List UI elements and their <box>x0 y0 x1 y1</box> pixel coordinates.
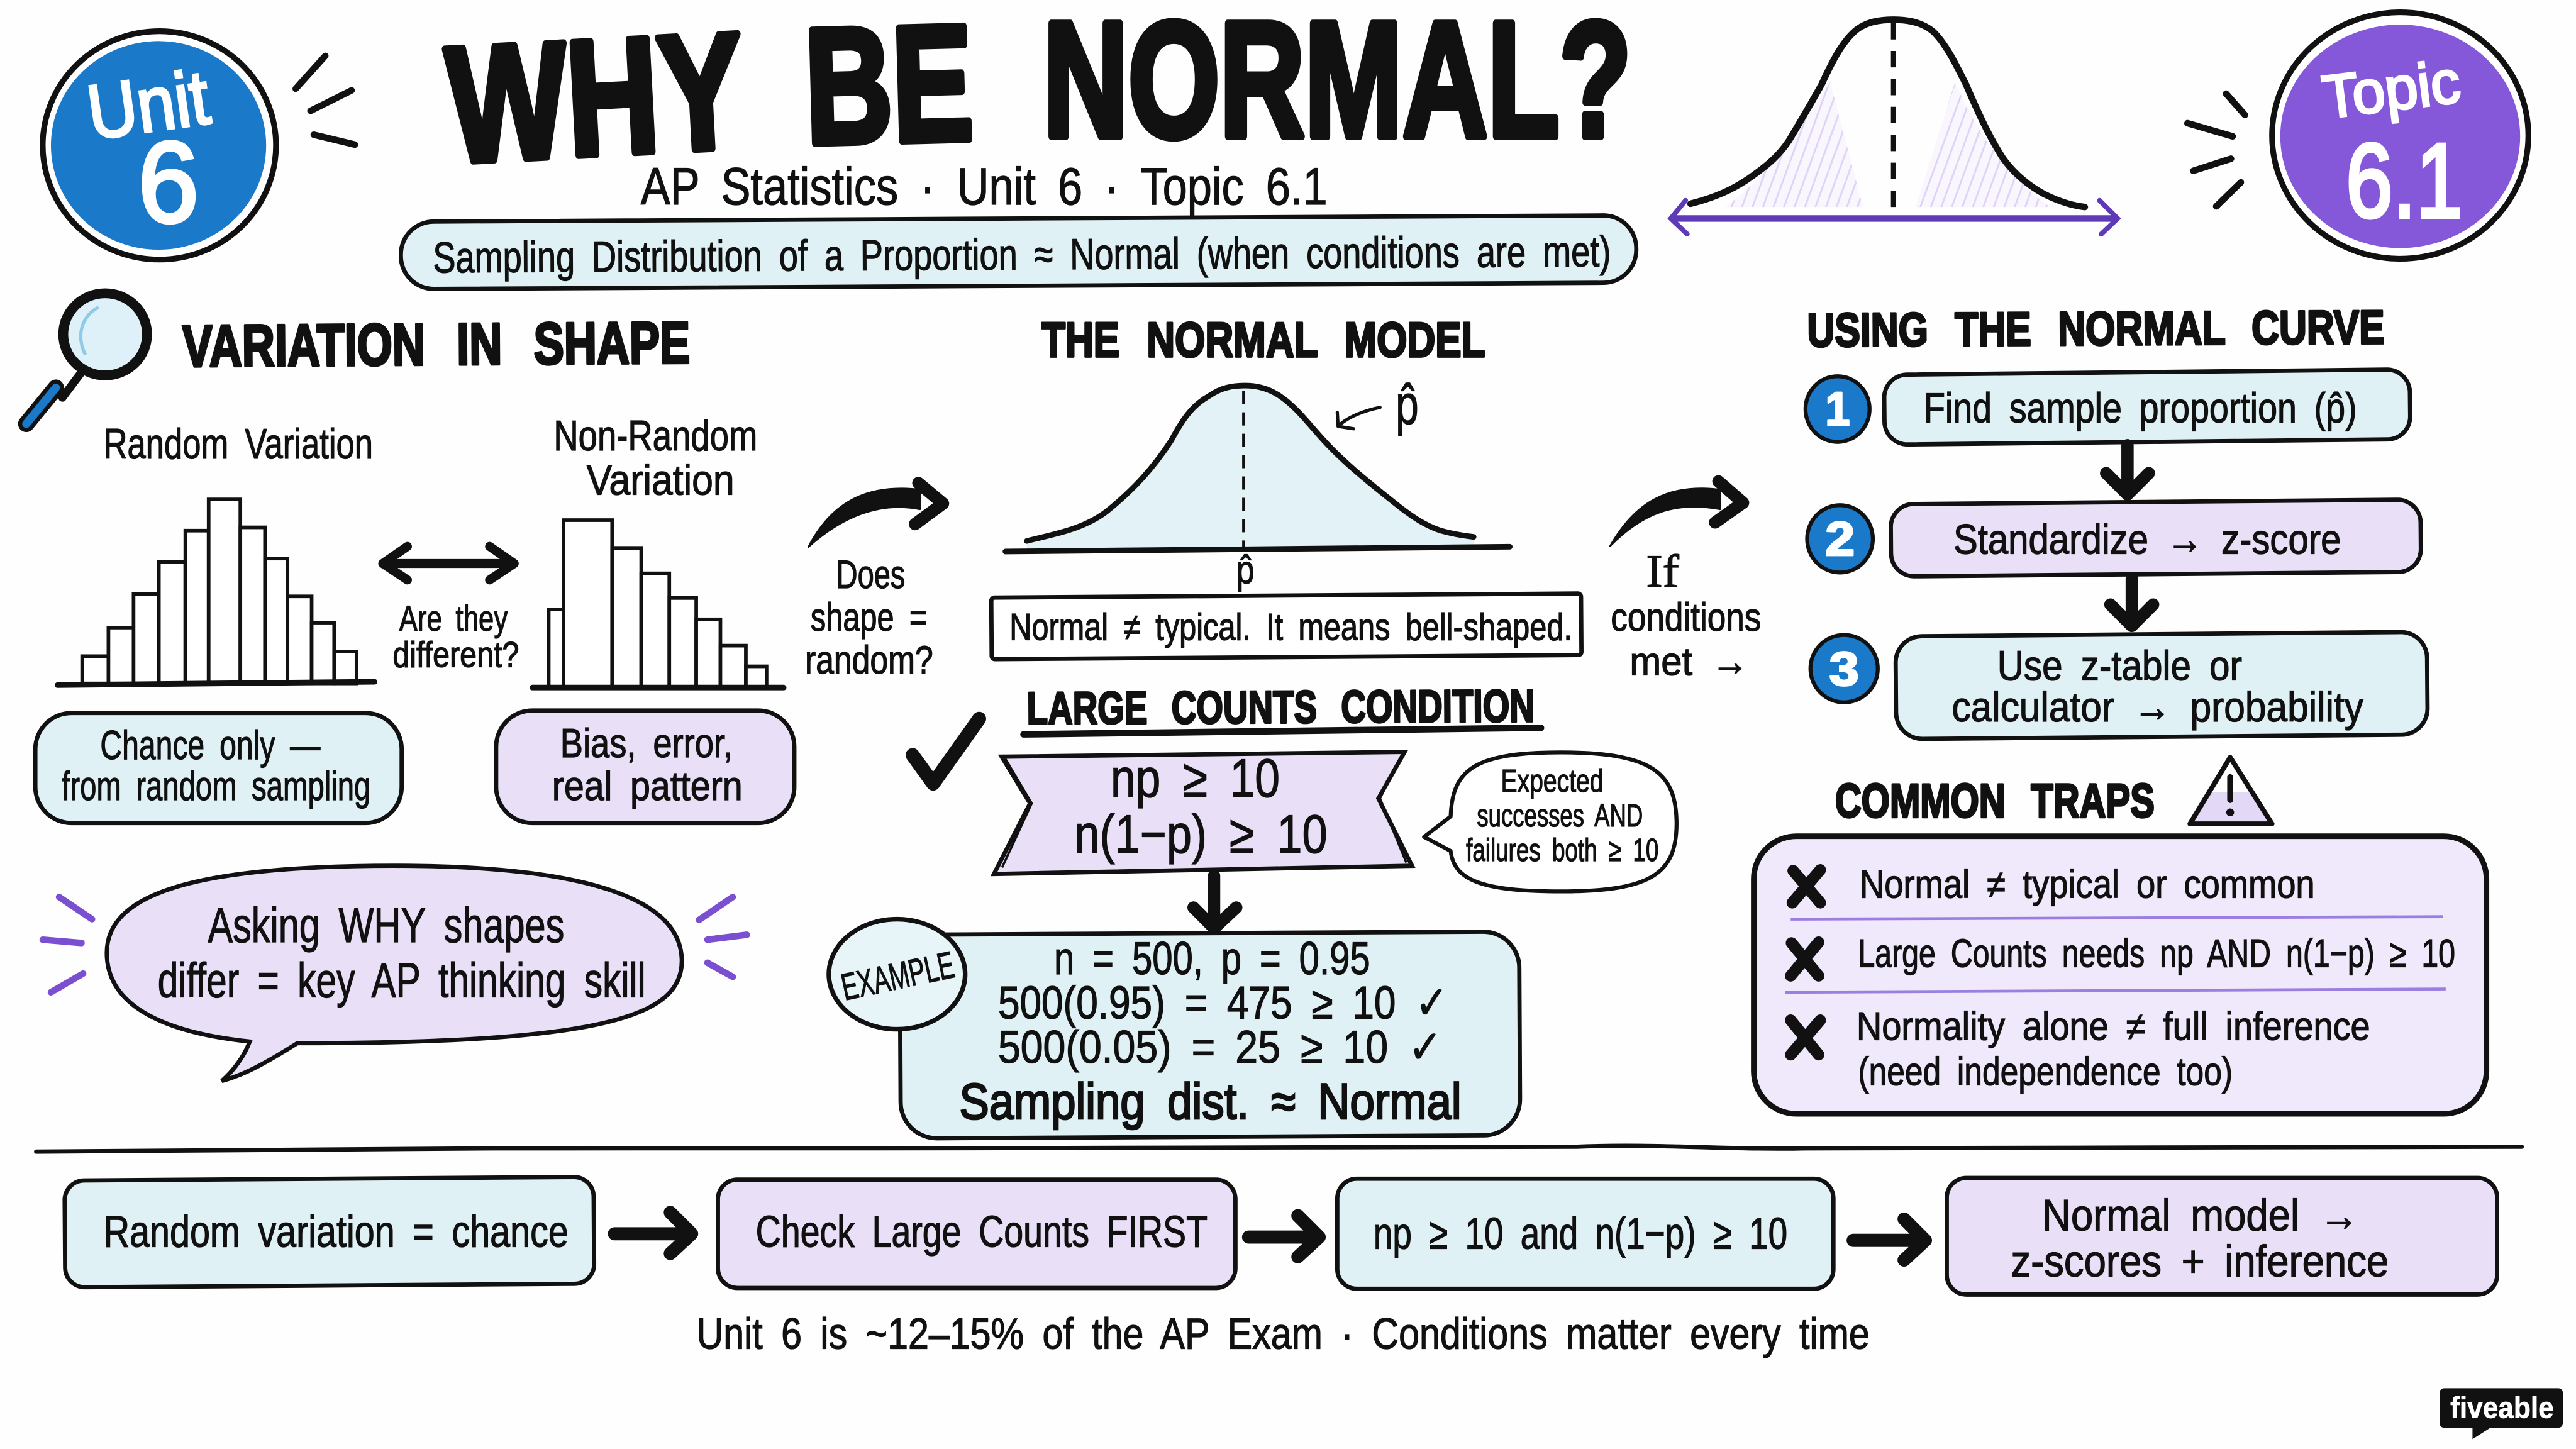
subtitle: AP Statistics · Unit 6 · Topic 6.1 <box>641 157 1328 216</box>
banner pill: sampling distribution: Sampling Distribution of a Proportion ≈ Normal (when conditions are met) <box>433 226 1611 282</box>
logo: fiveable <box>2440 1388 2563 1439</box>
step 3 badge <box>1811 635 1878 702</box>
text: if conditions met: met → <box>1629 640 1749 684</box>
callout: expected successes: Expected <box>1501 763 1604 799</box>
step 2 badge: 2 <box>1825 513 1855 566</box>
item: normality alone: (need independence too) <box>1858 1050 2233 1094</box>
callout: expected successes <box>1424 752 1677 891</box>
arrow: down to example <box>1194 875 1236 928</box>
label: random variation: Random Variation <box>104 421 373 468</box>
icon: emphasis rays right <box>2187 94 2245 206</box>
summary box 1: Random variation = chance <box>104 1207 569 1257</box>
callout: speech bubble <box>107 866 682 1081</box>
badge: Unit 6 <box>43 31 276 260</box>
panel: example <box>829 919 1520 1138</box>
step 2 box: Standardize → z-score <box>1953 516 2341 563</box>
panel: example: 500(0.05) = 25 ≥ 10 ✓ <box>998 1022 1442 1073</box>
box: chance only <box>35 713 402 823</box>
heading: the normal model: THE NORMAL MODEL <box>1041 312 1485 367</box>
step 1 badge: 1 <box>1825 383 1850 436</box>
arrow: curved to normal model <box>808 483 943 547</box>
step 1 box: Find sample proportion (p̂) <box>1924 385 2357 431</box>
arrow: summary 2 to 3 <box>1248 1216 1319 1257</box>
panel: common traps <box>1754 836 2487 1114</box>
text: if conditions met: conditions <box>1611 596 1761 640</box>
summary box 4: z-scores + inference <box>2011 1236 2389 1286</box>
logo: fiveable: fiveable <box>2450 1391 2554 1424</box>
text: does shape equal random: Does <box>836 553 905 597</box>
header bell curve <box>1671 19 2118 234</box>
label: p-hat with pointer arrow: p̂ <box>1396 374 1419 436</box>
item: normality alone <box>1790 1005 2370 1094</box>
icon: purple rays right <box>699 897 747 977</box>
badge: Topic 6.1 <box>2272 13 2528 258</box>
summary box 4 <box>1947 1178 2497 1294</box>
summary box 1 <box>65 1177 594 1287</box>
chart: symmetric histogram <box>57 499 375 685</box>
banner: large counts inequalities: n(1−p) ≥ 10 <box>1074 804 1328 865</box>
icon: emphasis rays left <box>296 56 355 145</box>
heading: using the normal curve: USING THE NORMAL CURVE <box>1807 301 2385 357</box>
banner: large counts inequalities: np ≥ 10 <box>1111 748 1280 809</box>
summary box 3 <box>1337 1179 1833 1289</box>
label: non-random variation: Non-Random <box>553 413 757 460</box>
label: non-random variation: Variation <box>587 457 735 504</box>
item: normal is not typical: Normal ≠ typical or common <box>1860 863 2315 907</box>
box: chance only: Chance only — <box>100 722 321 768</box>
label: p-hat with pointer arrow <box>1337 374 1419 436</box>
text: does shape equal random <box>805 553 933 682</box>
icon: magnifying glass <box>26 293 147 424</box>
text: if conditions met <box>1611 546 1761 684</box>
callout: expected successes: successes AND <box>1477 797 1643 833</box>
step 1 box <box>1884 369 2411 445</box>
title <box>443 0 1631 197</box>
text: are they different: Are they <box>399 599 508 639</box>
badge: example: EXAMPLE <box>838 943 958 1009</box>
text: are they different <box>392 599 519 675</box>
summary box 2: Check Large Counts FIRST <box>756 1207 1208 1257</box>
icon: purple rays left <box>43 897 92 992</box>
box: chance only: from random sampling <box>62 763 370 809</box>
panel: example: 500(0.95) = 475 ≥ 10 ✓ <box>998 978 1448 1029</box>
step 3 box <box>1896 632 2428 739</box>
box: bias: Bias, error, <box>560 720 733 766</box>
summary box 4: Normal model → <box>2042 1191 2359 1240</box>
item: normality alone: Normality alone ≠ full inference <box>1857 1005 2370 1049</box>
step 1 badge <box>1806 376 1870 442</box>
badge: Unit 6: Unit <box>82 54 214 157</box>
text: if conditions met: If <box>1646 546 1679 597</box>
box: bias: real pattern <box>552 763 743 809</box>
divider line <box>36 1146 2522 1152</box>
chart: skewed histogram <box>532 520 784 687</box>
chart: normal model bell curve: p̂ <box>1236 548 1254 592</box>
badge: example <box>829 919 965 1030</box>
heading: large counts condition: LARGE COUNTS CONDITION <box>1026 680 1535 735</box>
text: does shape equal random: random? <box>805 638 933 682</box>
badge: Unit 6: 6 <box>138 118 199 247</box>
panel: example: Sampling dist. ≈ Normal <box>960 1074 1462 1130</box>
arrow: curved to using the curve <box>1610 481 1743 547</box>
icon: warning triangle <box>2190 757 2272 824</box>
panel: example: n = 500, p = 0.95 <box>1054 933 1370 984</box>
summary box 2 <box>718 1180 1235 1288</box>
label: non-random variation <box>553 413 757 504</box>
arrow: summary 1 to 2 <box>614 1213 692 1253</box>
footer note: Unit 6 is ~12–15% of the AP Exam · Conditions matter every time <box>697 1309 1870 1358</box>
title: WHY <box>443 0 748 197</box>
chart: normal model bell curve <box>1006 386 1510 592</box>
box: normal means bell shaped <box>991 594 1582 659</box>
step 3 badge: 3 <box>1829 642 1859 696</box>
step 3 box: Use z-table or <box>1997 643 2242 689</box>
callout: expected successes: failures both ≥ 10 <box>1466 832 1658 868</box>
badge: Topic 6.1: Topic <box>2319 48 2464 131</box>
box: bias <box>496 711 794 823</box>
step 2 badge <box>1807 505 1873 572</box>
arrow: double headed <box>383 547 514 580</box>
box: normal means bell shaped: Normal ≠ typical. It means bell-shaped. <box>1009 606 1572 648</box>
callout: speech bubble: Asking WHY shapes <box>208 897 564 953</box>
summary box 3: np ≥ 10 and n(1−p) ≥ 10 <box>1374 1208 1787 1258</box>
text: does shape equal random: shape = <box>811 596 927 640</box>
heading: variation in shape: VARIATION IN SHAPE <box>182 309 690 379</box>
step 3 box: calculator → probability <box>1951 684 2364 731</box>
text: are they different: different? <box>392 635 519 675</box>
arrow: step 1 to 2 <box>2106 445 2149 494</box>
arrow: summary 3 to 4 <box>1853 1219 1926 1260</box>
step 2 box <box>1890 499 2421 577</box>
arrow: step 2 to 3 <box>2111 579 2153 626</box>
callout: speech bubble: differ = key AP thinking skill <box>158 953 646 1008</box>
icon: big check mark <box>913 719 979 784</box>
badge: Topic 6.1: 6.1 <box>2346 123 2463 240</box>
banner pill: sampling distribution <box>401 215 1636 289</box>
heading: common traps: COMMON TRAPS <box>1835 775 2155 828</box>
banner: large counts inequalities <box>994 748 1412 874</box>
